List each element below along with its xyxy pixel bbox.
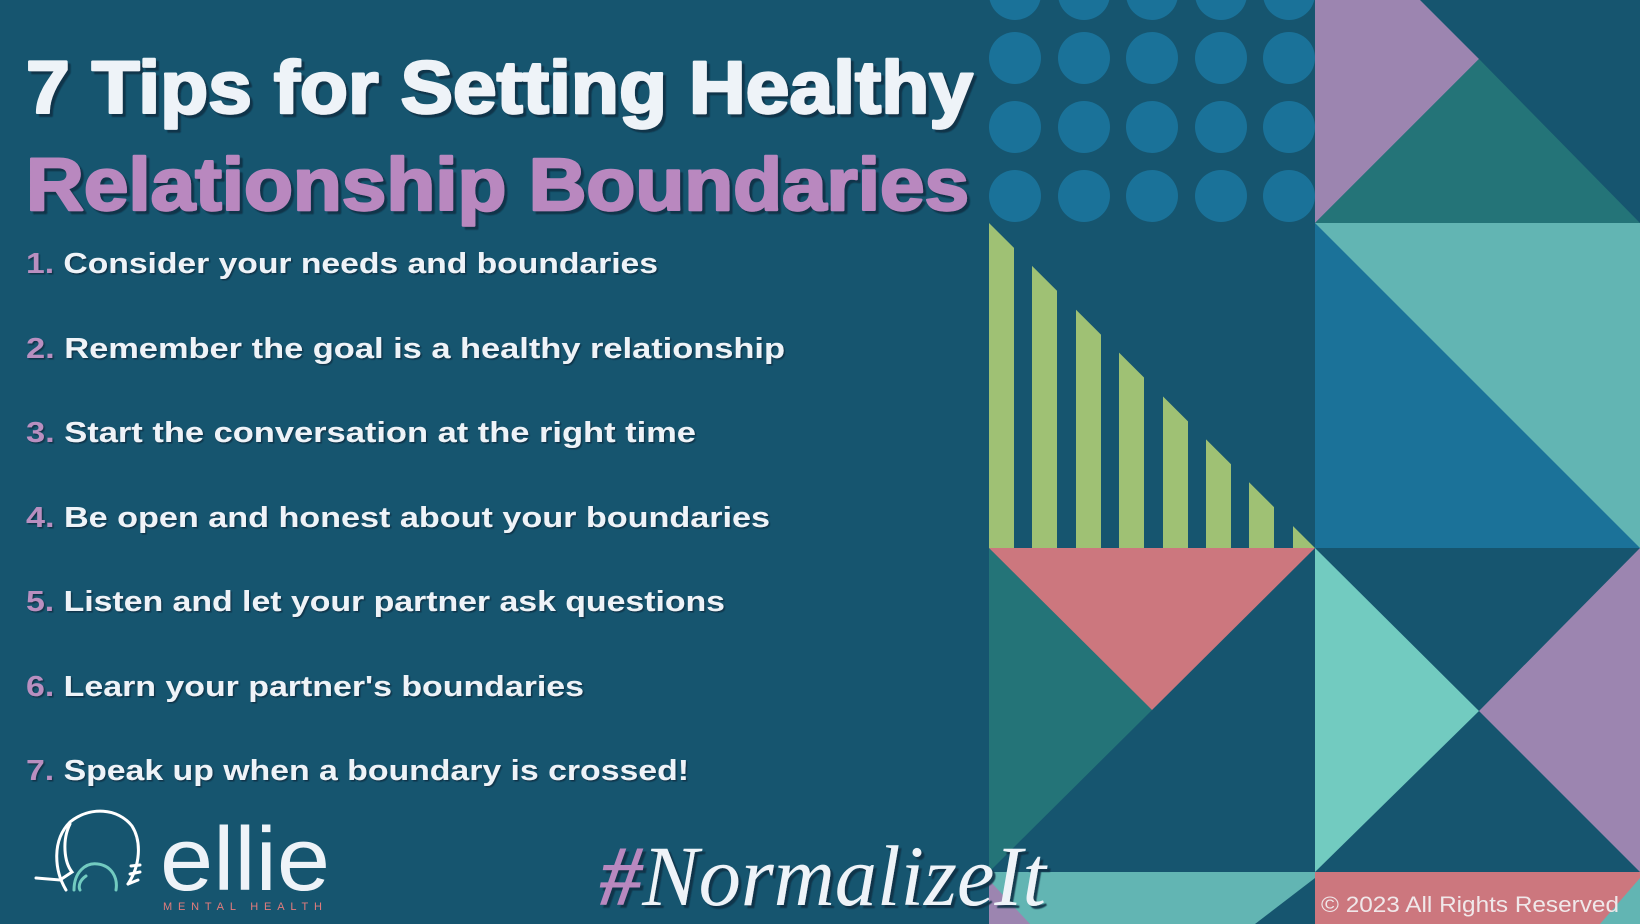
tips list: 7. Speak up when a boundary is crossed!	[26, 755, 689, 787]
icon: elephant	[36, 811, 140, 890]
middle-right cell	[1315, 223, 1640, 548]
title: 7 Tips for Setting Healthy	[26, 46, 973, 129]
tips list: 5. Listen and let your partner ask questions	[26, 586, 725, 618]
tips list: 1. Consider your needs and boundaries	[26, 248, 658, 280]
tips list: 4. Be open and honest about your boundaries	[26, 502, 770, 534]
bottom-left triangles	[989, 548, 1152, 872]
top-right triangles	[1315, 0, 1479, 223]
logo: ellie mental health	[36, 810, 330, 913]
title	[26, 46, 973, 226]
pattern: geometric panel	[989, 0, 1640, 924]
hashtag: #NormalizeIt: #NormalizeIt	[599, 828, 1048, 924]
green bars	[989, 223, 1318, 548]
tips list: 2. Remember the goal is a healthy relationship	[26, 333, 785, 365]
dots grid	[989, 0, 1315, 222]
ellie wordmark: ellie	[160, 810, 330, 910]
tips list: 3. Start the conversation at the right time	[26, 417, 696, 449]
tips list: 6. Learn your partner's boundaries	[26, 671, 584, 703]
title: Relationship Boundaries	[26, 143, 969, 226]
bottom strip	[989, 872, 1315, 924]
subtitle: MENTAL HEALTH	[163, 901, 325, 913]
copyright: © 2023 All Rights Reserved	[1321, 892, 1619, 917]
bottom-right triangles	[1315, 548, 1479, 872]
tips list	[26, 248, 785, 787]
